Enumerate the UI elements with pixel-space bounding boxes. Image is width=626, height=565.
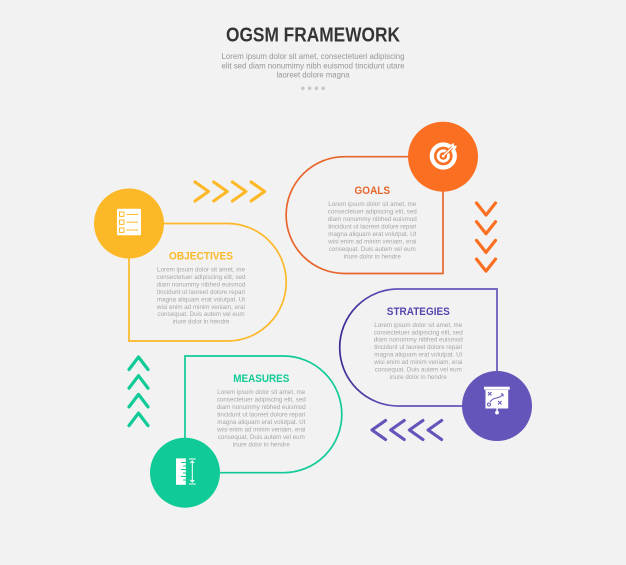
arrows: up chevrons [129,357,148,426]
header [222,24,405,90]
goals icon circle [408,122,478,192]
goals body text: wisi enim ad minim veniam, erai [327,238,417,246]
measures outline [185,356,342,473]
icon: ruler and height arrow [176,458,196,485]
objectives body text: tincidunt ut laoreet dolore repari [157,289,245,296]
subtitle [222,51,405,80]
subtitle: laoreet dolore magna [276,70,350,80]
objectives body text: iriure dolor in hendre [172,319,230,326]
objectives body text: consectetuer adipiscing elit, sed [156,274,246,281]
objectives body text: consequat. Duis autem vel eum [158,311,245,318]
objectives outline [129,224,286,341]
objectives body text: wisi enim ad minim veniam, erai [156,304,245,311]
goals body text: consequat. Duis autem vel eum [329,246,416,253]
goals outline [286,157,443,274]
goals body text: magna aliquam erat volutpat. Ut [328,231,416,238]
arrows: left chevrons [372,420,442,440]
measures icon circle [150,438,220,508]
objectives heading: OBJECTIVES [169,251,233,263]
strategies body text: consectetuer adipiscing elit, sed [374,329,463,336]
objectives body text [156,266,246,326]
goals heading: GOALS [355,185,390,197]
measures body text: wisi enim ad minim veniam, erai [216,426,306,434]
strategies body text [373,322,463,381]
strategies heading: STRATEGIES [387,306,450,318]
measures body text: diam nonummy nibhed euismod [217,404,306,411]
goals body text: iriure dolor in hendre [344,253,401,260]
goals body text [327,201,417,260]
strategies body text: diam nonummy nibhed euismod [374,337,463,344]
measures heading: MEASURES [233,373,289,385]
goals body text: diam nonummy nibhed euismod [328,216,417,223]
objectives body text: Lorem ipsum dolor sit amet, me [157,266,245,274]
strategies body text: iriure dolor in hendre [390,374,447,381]
arrows: right chevrons [195,182,265,201]
objectives body text: diam nonummy nibhed euismod [156,281,246,288]
measures body text: iriure dolor in hendre [233,441,290,448]
pagination dots [301,86,325,90]
panel: goals [286,122,496,274]
measures body text [216,389,306,448]
panel: objectives [94,182,286,341]
goals body text: Lorem ipsum dolor sit amet, me [328,201,417,208]
strategies body text: tincidunt ut laoreet dolore repari [374,344,463,351]
measures body text: magna aliquam erat volutpat. Ut [217,419,305,426]
measures body text: consequat. Duis autem vel eum [218,434,305,441]
strategies body text: Lorem ipsum dolor sit amet, me [374,322,463,329]
measures body text: tincidunt ut laoreet dolore repari [217,412,306,419]
objectives body text: magna aliquam erat volutpat. Ut [157,296,245,303]
arrows: down chevrons [476,203,496,271]
measures body text: Lorem ipsum dolor sit amet, me [217,389,306,396]
icon: strategy board [484,387,510,414]
strategies outline [340,289,497,406]
goals body text: consectetuer adipiscing elit, sed [328,209,417,216]
objectives icon circle [94,188,164,258]
panel: strategies [340,289,532,441]
strategies icon circle [462,371,532,441]
subtitle: Lorem ipsum dolor sit amet, consectetueri adipiscing [222,51,405,61]
title: OGSM FRAMEWORK [226,24,400,46]
goals body text: tincidunt ut laoreet dolore repari [328,224,417,231]
subtitle: elit sed diam nonumimy nibh euismod tincidunt utare [222,60,405,70]
strategies body text: wisi enim ad minim veniam, erai [373,359,463,366]
icon: target [430,142,457,170]
strategies body text: consequat. Duis autem vel eum [375,366,462,374]
measures body text: consectetuer adipiscing elit, sed [217,397,306,404]
strategies body text: magna aliquam erat volutpat. Ut [374,352,462,359]
icon: checklist [117,209,141,235]
panel: measures [129,356,342,508]
